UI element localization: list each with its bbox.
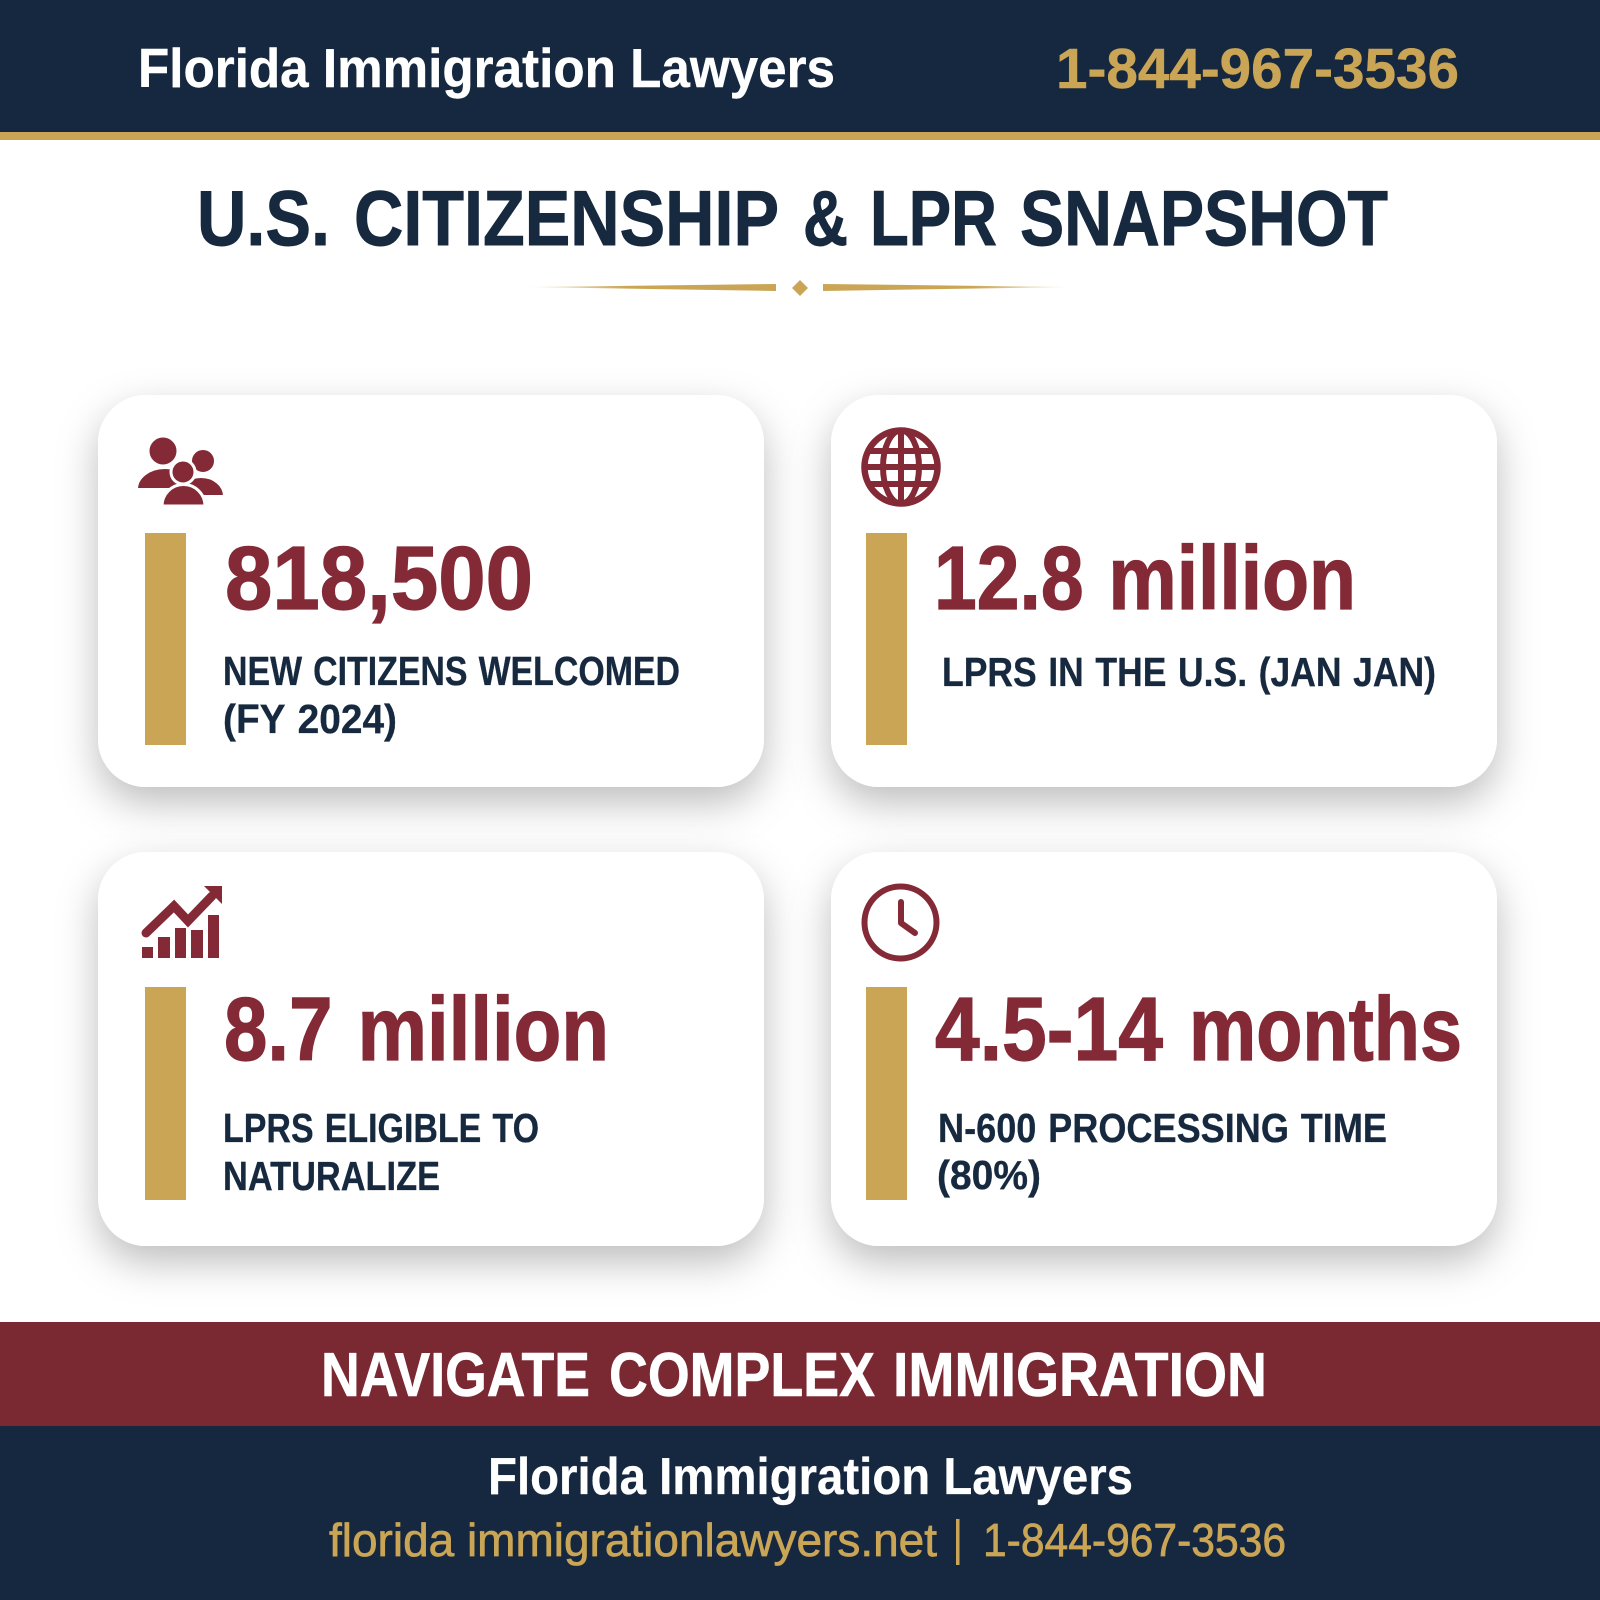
header phone number: 1-844-967-3536	[1056, 37, 1459, 101]
stat label: (80%)	[937, 1152, 1041, 1198]
icon: rising chart	[142, 886, 222, 958]
footer website and phone	[329, 1514, 1286, 1566]
stat value: 12.8 million	[934, 529, 1356, 629]
stat label: (FY 2024)	[223, 696, 397, 742]
header firm name: Florida Immigration Lawyers	[138, 37, 835, 99]
title: U.S.	[197, 174, 330, 262]
title: LPR	[870, 174, 997, 262]
icon: globe	[864, 430, 938, 504]
panel: new citizens	[98, 395, 764, 787]
title divider	[528, 280, 1071, 296]
icon: clock	[864, 886, 936, 958]
panel: processing time	[831, 852, 1497, 1246]
stat label	[223, 648, 680, 742]
stat value: 4.5-14	[935, 980, 1163, 1080]
footer website and phone: 1-844-967-3536	[983, 1514, 1286, 1566]
gold accent bar	[145, 987, 186, 1200]
stat label: LPRS ELIGIBLE TO	[223, 1105, 539, 1151]
call to action text: NAVIGATE	[321, 1341, 590, 1410]
call to action text: COMPLEX	[609, 1341, 875, 1410]
call to action band	[0, 1322, 1600, 1426]
stat label: N-600 PROCESSING TIME	[938, 1105, 1387, 1151]
header band	[0, 0, 1600, 140]
footer firm name: Florida Immigration Lawyers	[488, 1448, 1133, 1506]
gold accent bar	[145, 533, 186, 745]
call to action text: IMMIGRATION	[893, 1341, 1267, 1410]
icon: people group	[137, 436, 224, 506]
stat value: 8.7 million	[224, 980, 609, 1080]
stat label: LPRS IN THE U.S. (JAN JAN)	[942, 649, 1436, 695]
stat label	[223, 1105, 539, 1199]
stat label: NATURALIZE	[223, 1153, 440, 1199]
stat value	[935, 980, 1462, 1080]
gold accent bar	[866, 987, 907, 1200]
panel: LPRs in the U.S.	[831, 395, 1497, 787]
stat value: 818,500	[225, 529, 533, 629]
stat label: NEW CITIZENS WELCOMED	[223, 648, 680, 694]
title: SNAPSHOT	[1020, 174, 1388, 262]
gold accent bar	[866, 533, 907, 745]
call to action text	[321, 1341, 1267, 1410]
stat value: months	[1189, 980, 1462, 1080]
title: CITIZENSHIP	[354, 174, 779, 262]
panel: eligible to naturalize	[98, 852, 764, 1246]
stat label	[937, 1105, 1387, 1198]
footer band	[0, 1426, 1600, 1600]
title	[197, 174, 1388, 262]
footer website and phone: florida immigrationlawyers.net	[329, 1514, 937, 1566]
title: &	[803, 174, 848, 262]
